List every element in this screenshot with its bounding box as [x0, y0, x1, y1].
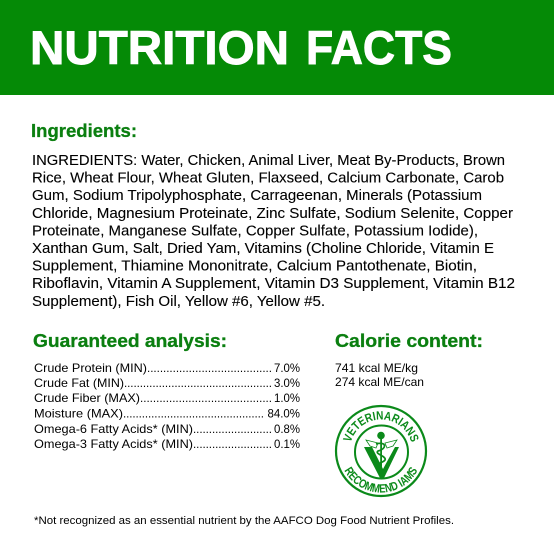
ingredients text block: Rice, Wheat Flour, Wheat Gluten, Flaxseed, Calcium Carbonate, Carob: [32, 171, 504, 187]
guaranteed analysis table: .........................................: [140, 392, 272, 405]
ingredients text block: Supplement, Thiamine Mononitrate, Calcium Pantothenate, Biotin,: [32, 259, 477, 275]
heading: calorie content: Calorie content:: [335, 330, 483, 351]
ingredients text block: Supplement), Fish Oil, Yellow #6, Yellow #5.: [32, 294, 325, 310]
ingredients text block: Gum, Sodium Tripolyphosphate, Carrageenan, Minerals (Potassium: [32, 188, 482, 204]
header band: [0, 0, 554, 95]
calorie values: [335, 362, 424, 389]
heading: guaranteed analysis: Guaranteed analysis:: [33, 330, 227, 351]
ingredients text block: Chloride, Magnesium Proteinate, Zinc Sulfate, Sodium Selenite, Copper: [32, 206, 513, 222]
title: FACTS: [306, 22, 452, 75]
guaranteed analysis table: .........................: [193, 438, 272, 451]
guaranteed analysis table: 7.0%: [274, 362, 300, 375]
guaranteed analysis table: Omega-3 Fatty Acids* (MIN): [34, 438, 193, 451]
guaranteed analysis table: .......................................: [147, 362, 272, 375]
ingredients text block: Xanthan Gum, Salt, Dried Yam, Vitamins (Choline Chloride, Vitamin E: [32, 241, 494, 257]
guaranteed analysis table: 1.0%: [274, 392, 300, 405]
guaranteed analysis table: [34, 362, 300, 451]
calorie values: 741 kcal ME/kg: [335, 362, 418, 375]
ingredients text block: INGREDIENTS: Water, Chicken, Animal Liver, Meat By-Products, Brown: [32, 153, 505, 169]
ingredients text block: Proteinate, Manganese Sulfate, Copper Sulfate, Potassium Iodide),: [32, 223, 478, 239]
ingredients text block: Riboflavin, Vitamin A Supplement, Vitamin D3 Supplement, Vitamin B12: [32, 276, 515, 292]
guaranteed analysis table: .............................................: [123, 408, 264, 420]
guaranteed analysis table: Crude Fat (MIN): [34, 377, 124, 390]
title: NUTRITION: [30, 22, 289, 75]
ingredients text block: [32, 153, 515, 310]
guaranteed analysis table: 3.0%: [274, 377, 300, 390]
guaranteed analysis table: Moisture (MAX): [34, 408, 123, 420]
guaranteed analysis table: Crude Protein (MIN): [34, 362, 147, 375]
guaranteed analysis table: ...............................................: [124, 377, 272, 390]
calorie values: 274 kcal ME/can: [335, 376, 424, 389]
guaranteed analysis table: .........................: [193, 423, 272, 436]
icon: veterinarians recommend badge: VETERINARIANS: [342, 411, 418, 442]
icon: veterinarians recommend badge: [334, 404, 428, 498]
icon: veterinarians recommend badge: RECOMMEND IAMS: [344, 466, 417, 493]
guaranteed analysis table: Crude Fiber (MAX): [34, 392, 140, 405]
footnote: *Not recognized as an essential nutrient by the AAFCO Dog Food Nutrient Profiles.: [34, 515, 454, 527]
guaranteed analysis table: 0.8%: [274, 423, 300, 436]
guaranteed analysis table: 0.1%: [274, 438, 300, 451]
heading: ingredients: Ingredients:: [31, 120, 137, 141]
guaranteed analysis table: 84.0%: [268, 408, 300, 420]
guaranteed analysis table: Omega-6 Fatty Acids* (MIN): [34, 423, 193, 436]
title: [30, 22, 452, 75]
